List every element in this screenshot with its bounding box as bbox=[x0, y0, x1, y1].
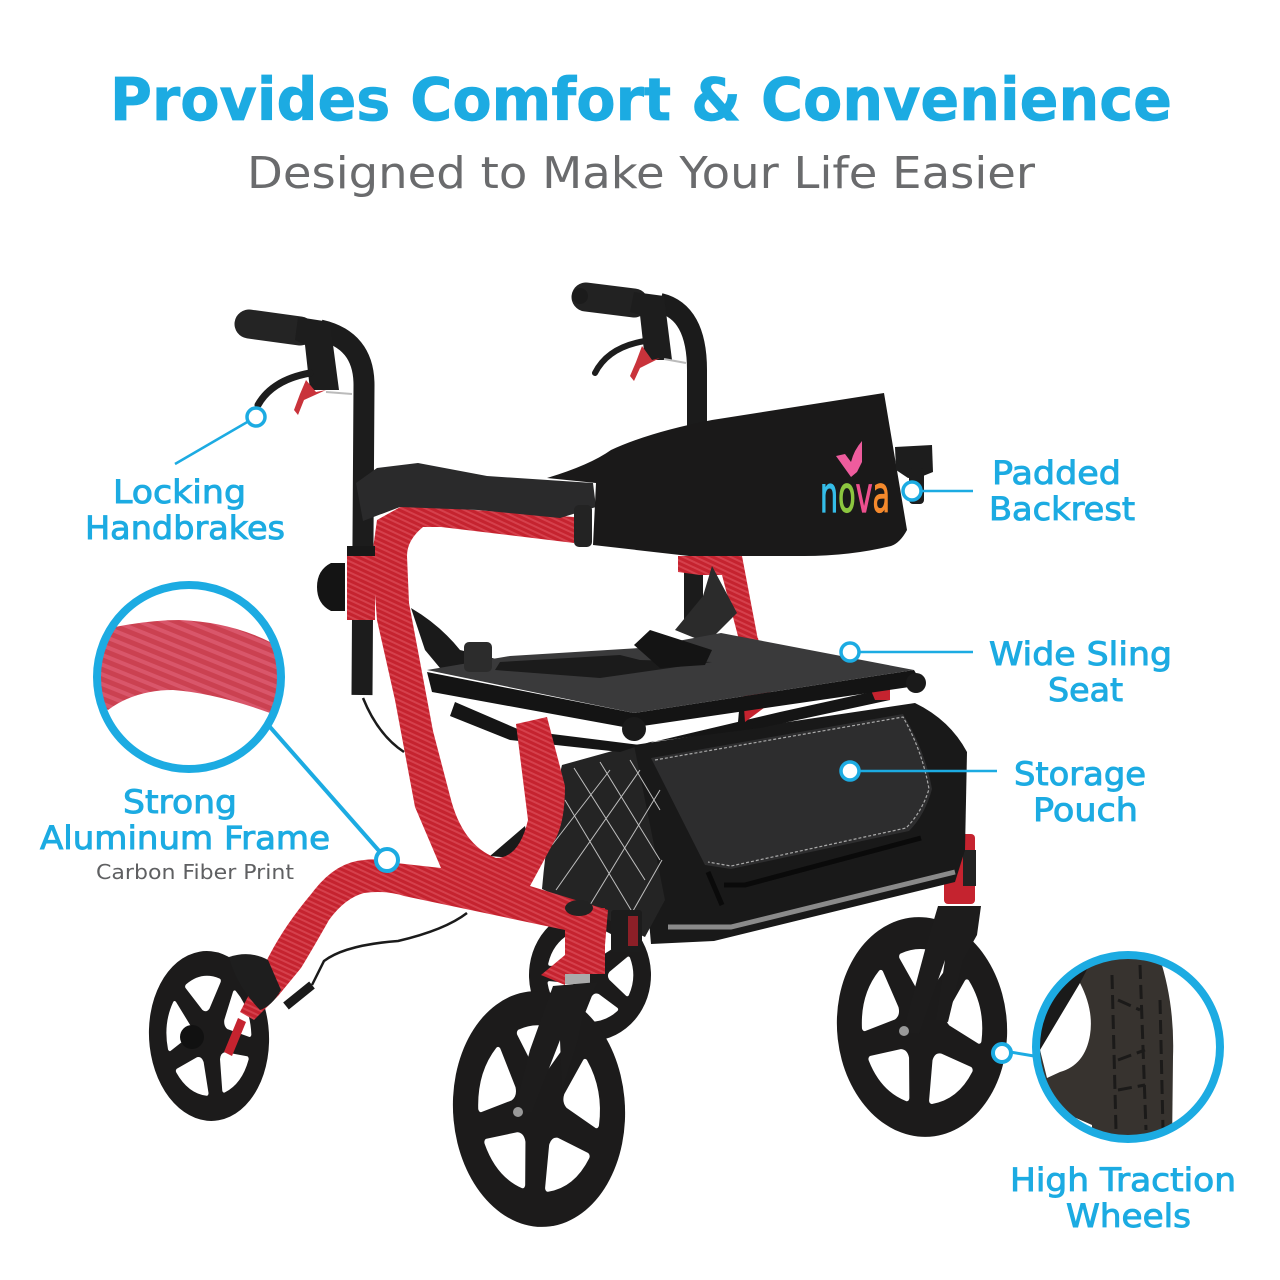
right front fork bbox=[899, 834, 981, 1036]
tire detail bbox=[1040, 959, 1174, 1135]
label: storage pouch bbox=[1014, 755, 1146, 829]
rear red support bbox=[678, 556, 758, 640]
callout: padded backrest pointer bbox=[903, 482, 973, 500]
dot bbox=[993, 1044, 1011, 1062]
callout: high traction wheels magnifier bbox=[993, 950, 1220, 1150]
dot bbox=[376, 849, 398, 871]
nova wordmark: nova bbox=[820, 466, 890, 524]
label: locking handbrakes bbox=[85, 473, 285, 547]
padded backrest bbox=[547, 393, 907, 556]
label: high traction wheels: High Traction bbox=[1010, 1161, 1236, 1199]
callout: strong aluminum frame magnifier bbox=[95, 585, 398, 871]
under-seat frame bbox=[450, 638, 890, 752]
left handle grip bbox=[249, 324, 300, 331]
brake cable bbox=[312, 698, 467, 985]
pouch zipper bbox=[708, 838, 921, 905]
label: strong aluminum frame bbox=[40, 783, 330, 884]
armrest bar bbox=[356, 463, 596, 521]
label: wide sling seat: Wide Sling bbox=[989, 635, 1172, 673]
label: strong aluminum frame: Carbon Fiber Print bbox=[96, 860, 294, 884]
label: padded backrest bbox=[989, 454, 1135, 528]
left seat strap bbox=[411, 608, 660, 688]
butterfly bbox=[836, 441, 862, 477]
left handle tube bbox=[320, 330, 364, 695]
connector line bbox=[270, 727, 380, 852]
carbon fiber detail bbox=[101, 620, 277, 713]
label: high traction wheels: Wheels bbox=[1066, 1197, 1191, 1235]
nova logo bbox=[820, 441, 890, 524]
connector line bbox=[1010, 1052, 1034, 1056]
callout: storage pouch pointer bbox=[841, 762, 997, 780]
seat buckle bbox=[634, 630, 712, 668]
reflective band bbox=[668, 872, 955, 927]
label: storage pouch: Storage bbox=[1014, 755, 1146, 793]
label: padded backrest: Backrest bbox=[989, 490, 1135, 528]
title: Provides Comfort & Convenience bbox=[110, 65, 1172, 134]
front collar bbox=[541, 900, 642, 985]
callout: wide sling seat pointer bbox=[841, 643, 973, 661]
label: strong aluminum frame: Strong bbox=[123, 783, 237, 821]
brake block on rear wheel bbox=[229, 954, 281, 1010]
red leg seen through rear wheel bbox=[224, 1018, 246, 1056]
pouch flap bbox=[651, 714, 932, 869]
label: high traction wheels bbox=[1010, 1161, 1236, 1235]
right handle and brake bbox=[572, 288, 703, 620]
back wheel bbox=[512, 890, 668, 1060]
back strap bbox=[675, 566, 737, 643]
label: storage pouch: Pouch bbox=[1033, 791, 1138, 829]
knob bbox=[317, 563, 345, 611]
pouch strap seen through frame bbox=[490, 826, 528, 858]
rollator product illustration bbox=[140, 288, 1011, 1238]
subtitle: Designed to Make Your Life Easier bbox=[247, 148, 1036, 199]
label: locking handbrakes: Handbrakes bbox=[85, 509, 285, 547]
label: wide sling seat bbox=[989, 635, 1172, 709]
callout: locking handbrakes pointer bbox=[175, 408, 265, 464]
left brake lever bbox=[258, 317, 352, 415]
sling seat bbox=[427, 630, 926, 741]
label: locking handbrakes: Locking bbox=[113, 473, 246, 511]
label: strong aluminum frame: Aluminum Frame bbox=[40, 819, 330, 857]
backrest bracket bbox=[895, 445, 933, 504]
label: padded backrest: Padded bbox=[992, 454, 1121, 492]
frame clamp bbox=[347, 548, 375, 620]
storage pouch bbox=[542, 703, 967, 944]
front wheel bbox=[447, 980, 631, 1238]
left rear wheel bbox=[140, 941, 278, 1131]
right front wheel bbox=[833, 908, 1011, 1146]
front fork bbox=[514, 982, 598, 1112]
label: wide sling seat: Seat bbox=[1048, 671, 1123, 709]
aluminum frame bbox=[240, 505, 608, 1020]
